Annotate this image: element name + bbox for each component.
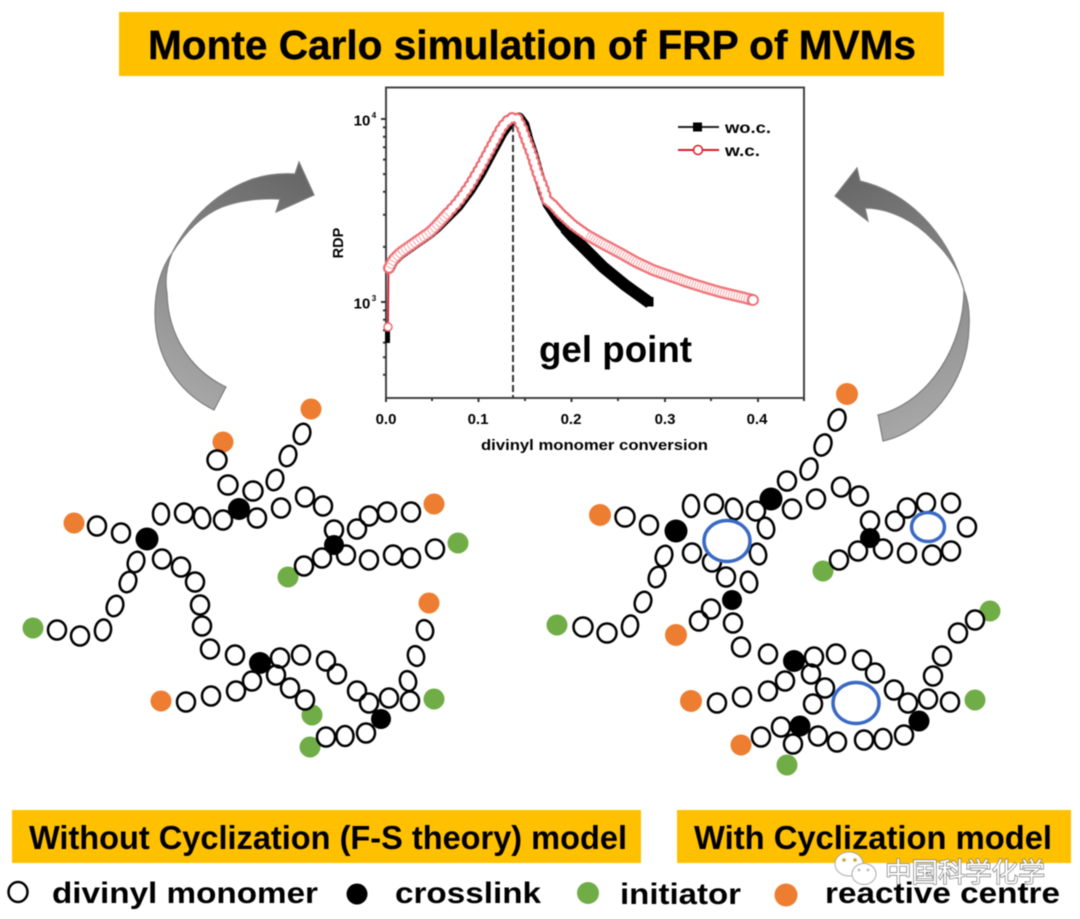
y axis label: RDP (331, 227, 347, 258)
chart tick labels: 10 (354, 112, 370, 130)
legend: initiator: initiator (620, 878, 741, 911)
watermark text: 中国科学化学 (885, 858, 1045, 888)
chart tick labels: 0.2 (561, 411, 581, 428)
icon: wechat logo (835, 852, 876, 884)
chart tick labels: 0.4 (747, 411, 768, 428)
banner: with cyclization model: With Cyclization model (694, 819, 1052, 856)
arrow: right curved arrow to chart (835, 168, 969, 441)
chart tick labels (354, 111, 768, 428)
legend: crosslink (346, 877, 541, 910)
initiators (right) (546, 560, 1000, 776)
reactive centres (right) (589, 383, 858, 756)
series: without cyclization (388, 118, 654, 343)
chart axes (381, 88, 804, 402)
watermark (835, 852, 1045, 888)
legend: reactive centre: reactive centre (825, 877, 1060, 910)
chart tick labels: 0.3 (655, 411, 675, 428)
network: with cyclization model (546, 383, 1000, 776)
title banner (119, 12, 944, 76)
network: without cyclization model (22, 398, 468, 758)
legend: crosslink: crosslink (395, 877, 541, 910)
gel point dashed line (512, 125, 514, 398)
chart tick labels: 0.0 (376, 411, 396, 428)
legend (8, 877, 1060, 911)
initiators (left) (22, 532, 468, 758)
monomer rings (right) (574, 407, 984, 754)
crosslinks (left) (136, 498, 391, 729)
x axis label: divinyl monomer conversion (481, 437, 708, 454)
banner: without cyclization model: Without Cyclization (F-S theory) model (29, 819, 627, 856)
monomer rings (left) (48, 421, 444, 746)
legend: divinyl monomer: divinyl monomer (52, 877, 318, 910)
chart tick labels: 0.1 (468, 411, 488, 428)
banner: with cyclization model (677, 810, 1071, 863)
legend: initiator (577, 878, 741, 911)
crosslinks (right) (664, 488, 930, 736)
gel point label: gel point (539, 329, 692, 370)
series: with cyclization (384, 118, 758, 331)
reactive centres (left) (64, 398, 444, 712)
cyclization rings (blue) (704, 512, 944, 724)
arrow: left curved arrow to chart (155, 162, 314, 410)
chart legend (678, 120, 771, 160)
chart: RDP vs divinyl monomer conversion (331, 88, 804, 454)
chart legend: wo.c. (724, 120, 771, 137)
banner: without cyclization model (12, 810, 641, 863)
chart tick labels: 3 (372, 294, 377, 303)
chart tick labels: 4 (372, 111, 377, 120)
title banner: Monte Carlo simulation of FRP of MVMs (148, 22, 916, 68)
chart legend: w.c. (724, 143, 760, 160)
chart tick labels: 10 (354, 296, 370, 312)
